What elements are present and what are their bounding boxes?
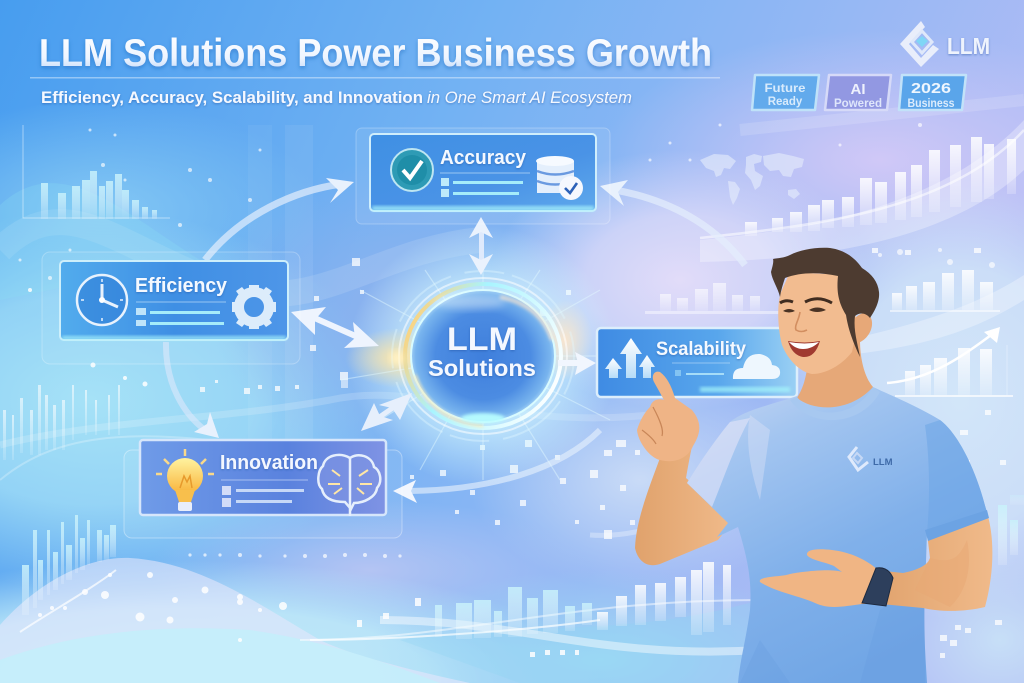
icon: check badge — [391, 149, 433, 191]
right forearm — [870, 513, 992, 611]
badge: Future Ready: Ready — [768, 96, 803, 108]
label: Efficiency — [135, 275, 228, 297]
subtitle: in One Smart AI Ecosystem — [427, 88, 632, 107]
watch — [862, 568, 893, 606]
bar chart: bottom left — [20, 515, 116, 632]
arrow: innovation to hub — [361, 393, 412, 431]
text lines — [675, 370, 724, 376]
icon: brain — [318, 455, 380, 516]
shirt logo: LLM — [873, 457, 893, 468]
icon: database — [536, 156, 583, 200]
badge: 2026 Business: 2026 — [911, 80, 951, 97]
face — [778, 272, 858, 374]
arrow: efficiency to innovation — [166, 342, 219, 438]
badge: AI Powered: AI — [850, 81, 866, 98]
open hand — [760, 549, 880, 607]
badge: 2026 Business — [899, 75, 966, 110]
card: Innovation — [124, 440, 402, 538]
icon: clock — [77, 275, 127, 325]
eyes — [783, 308, 826, 312]
bar chart: top left — [23, 125, 170, 219]
sleeve cuff right — [925, 510, 989, 541]
world map — [700, 153, 804, 205]
badge: 2026 Business: Business — [908, 98, 954, 110]
hub: LLM Solutions — [391, 271, 574, 441]
label: Accuracy — [440, 147, 527, 169]
badge: AI Powered — [825, 75, 891, 110]
arrow: scalability to innovation — [393, 430, 600, 503]
bar chart: bottom centre — [310, 587, 600, 640]
glow behind hub — [340, 220, 630, 500]
card: Accuracy — [356, 128, 610, 224]
logo: LLM: LLM — [947, 33, 990, 59]
hair — [771, 248, 879, 357]
hub: LLM Solutions: LLM — [447, 321, 517, 357]
title: LLM Solutions Power Business Growth — [39, 32, 712, 75]
eyebrows — [780, 299, 832, 303]
label: Scalability — [656, 339, 746, 360]
icon: up arrows — [605, 338, 655, 378]
smile — [788, 341, 820, 357]
shirt logo — [849, 447, 893, 470]
logo: LLM — [900, 21, 990, 67]
card: Efficiency — [42, 252, 300, 364]
bar chart: top right — [700, 130, 1024, 238]
bar chart: lower right of arm — [597, 562, 731, 635]
nose — [796, 312, 807, 332]
bar chart: mid right behind person — [645, 283, 795, 314]
subtitle: Efficiency, Accuracy, Scalability, and Innovation — [41, 88, 423, 107]
card: Scalability — [597, 328, 797, 397]
hub: LLM Solutions: Solutions — [428, 355, 536, 381]
badge: Future Ready: Future — [764, 83, 806, 95]
icon: cloud — [733, 354, 780, 379]
growth chart with arrow — [887, 327, 1013, 397]
neck — [797, 340, 873, 407]
arrow: efficiency to hub — [291, 307, 379, 348]
text lines — [441, 178, 523, 197]
subtitle — [41, 88, 632, 107]
arrow: efficiency to accuracy — [205, 178, 354, 260]
arrow: scalability to accuracy — [600, 180, 745, 265]
label: Innovation — [220, 452, 318, 474]
text lines — [136, 308, 224, 326]
arrow: hub to scalability — [558, 352, 596, 375]
dots and particles — [18, 123, 1006, 658]
icon: gear — [232, 285, 276, 329]
bar chart: upper right of person — [890, 270, 1000, 312]
ear — [853, 313, 872, 343]
person — [635, 248, 992, 683]
divider under title — [30, 77, 720, 78]
badge: AI Powered: Powered — [834, 98, 882, 110]
bar chart: mid left sticks — [3, 385, 120, 460]
badge: Future Ready — [752, 75, 819, 110]
icon: light bulb — [156, 449, 214, 511]
hub: rays — [340, 255, 630, 480]
arrow: accuracy to hub — [469, 217, 493, 275]
bar chart: right edge — [998, 495, 1024, 565]
raised arm — [635, 446, 732, 565]
torso and shirt — [687, 387, 987, 683]
shirt shading — [687, 418, 750, 507]
pointing hand — [637, 372, 699, 461]
text lines — [222, 486, 304, 507]
